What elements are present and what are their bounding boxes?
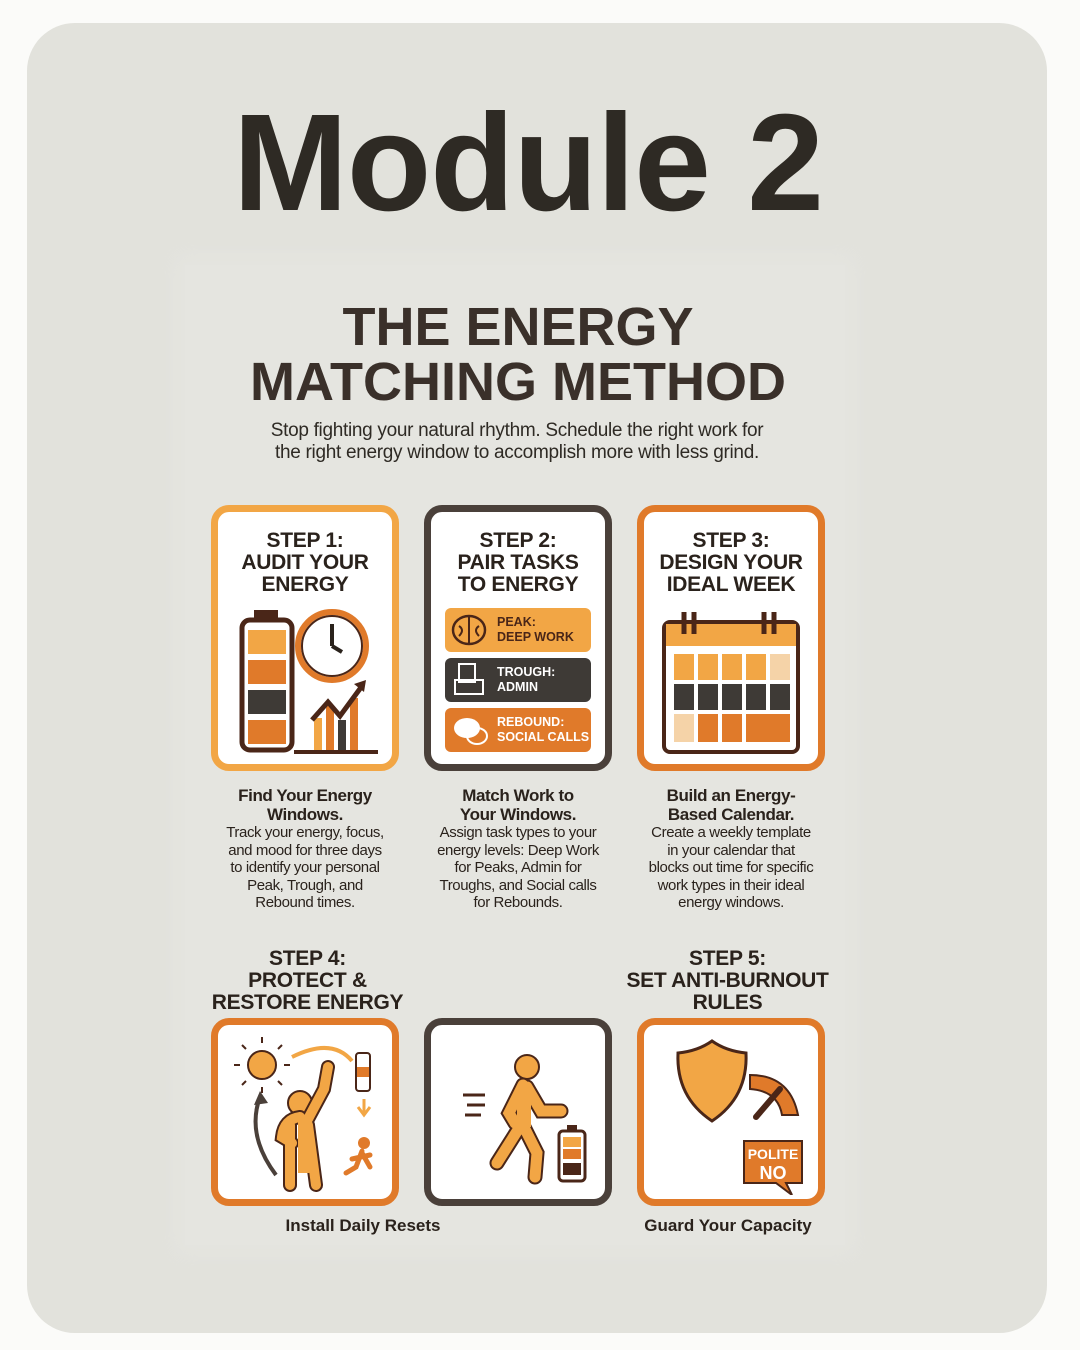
panel: running icon [424,1018,612,1206]
text: step 3: Build an Energy- [667,786,795,805]
text: step 2: Match Work to [462,786,574,805]
text: step 2: for Peaks, Admin for [454,859,582,876]
panel: step 1: AUDIT YOUR [241,551,369,574]
text: step 2: for Rebounds. [473,894,563,911]
text: step 1: Find Your Energy [238,786,372,805]
heading: step 4: STEP 4: [269,947,346,970]
panel: step 4 icon [211,1018,399,1206]
text: step 3: work types in their ideal [658,876,804,894]
task: peak [445,608,591,652]
title: Module 2 [233,86,823,240]
task: trough: TROUGH: [497,665,555,679]
panel: step 2: PAIR TASKS [457,551,579,574]
panel: step 2: TO ENERGY [458,573,578,596]
text: step 2 [437,786,600,911]
text: step 2: Troughs, and Social calls [439,876,597,894]
icon: calendar [662,612,800,754]
task: trough: ADMIN [497,680,538,694]
heading: step 5: RULES [693,991,762,1014]
heading: step 5: SET ANTI-BURNOUT [626,969,829,992]
text: step 3: energy windows. [678,894,784,911]
panel: step 5 icon: POLITE [748,1146,798,1162]
subtitle: Stop fighting your natural rhythm. Schedule the right work for [271,420,763,441]
panel: step 3 [637,505,825,771]
text: step 3: blocks out time for specific [649,859,813,876]
panel: step 3: IDEAL WEEK [667,573,795,596]
text: step 2: energy levels: Deep Work [437,842,599,858]
inner panel [185,265,845,1245]
heading [250,297,786,412]
text: step 3 [649,786,814,911]
panel: step 5 icon: NO [760,1163,786,1183]
text: step 1: to identify your personal [230,859,380,876]
task: rebound: REBOUND: [497,715,564,729]
panel: step 1: ENERGY [262,573,348,596]
text: step 5 caption: Guard Your Capacity [644,1216,812,1235]
task: peak: DEEP WORK [497,630,574,644]
text: step 3: Based Calendar. [668,805,794,824]
heading: step 4: PROTECT & [248,969,367,992]
heading: MATCHING METHOD [250,352,786,412]
subtitle [271,420,764,463]
text: step 1: Rebound times. [255,894,355,911]
text: step 2: Assign task types to your [440,824,596,841]
panel: step 1: STEP 1: [267,529,343,552]
text: step 1 [226,786,384,911]
text: step 1: Track your energy, focus, [226,824,384,841]
text: step 4 caption: Install Daily Resets [286,1216,440,1235]
task: trough [445,658,591,702]
text: step 1: Windows. [267,805,343,824]
panel: step 5 icon [637,1018,825,1206]
subtitle: the right energy window to accomplish more with less grind. [275,442,759,463]
panel: step 1 [211,505,399,771]
task: rebound [445,708,591,752]
text: step 1: and mood for three days [228,842,382,858]
text: step 1: Peak, Trough, and [247,876,363,894]
panel: step 2 [424,505,612,771]
heading: step 5: STEP 5: [689,947,766,970]
panel: step 3: DESIGN YOUR [659,551,803,574]
heading: THE ENERGY [342,297,694,357]
heading: step 4: RESTORE ENERGY [212,991,403,1014]
text: step 2: Your Windows. [460,805,576,824]
task: peak: PEAK: [497,615,536,629]
panel: step 3: STEP 3: [693,529,769,552]
icons: task symbols [452,614,488,745]
text: step 3: in your calendar that [667,842,795,858]
icon: battery clock chart [240,609,378,754]
heading: step 4 [212,947,404,1014]
task: rebound: SOCIAL CALLS [497,730,589,744]
text: step 3: Create a weekly template [651,824,811,841]
panel: step 2: STEP 2: [480,529,556,552]
heading: step 5 [626,947,829,1014]
